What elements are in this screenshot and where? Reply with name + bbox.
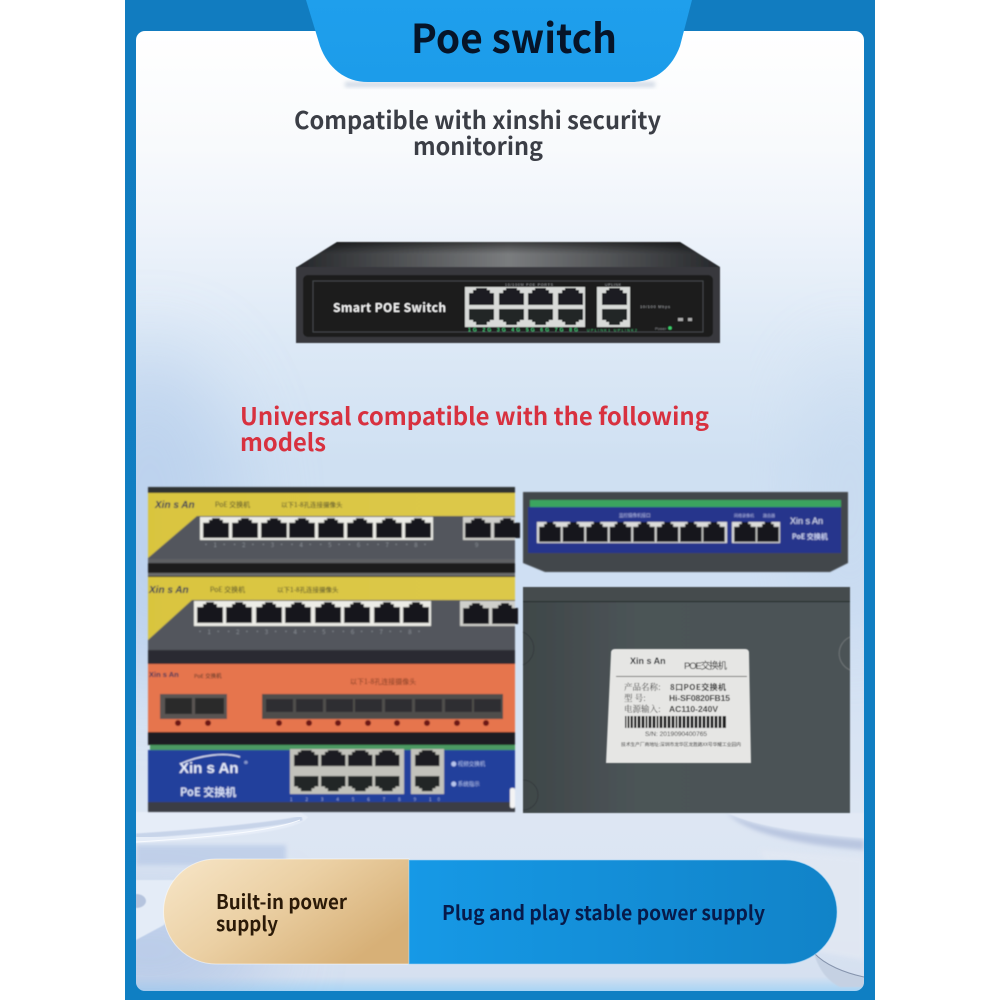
dark gap band <box>148 559 515 577</box>
orange switch: Xin s An <box>149 670 179 679</box>
power indicator <box>655 318 692 331</box>
faceplate labels: 网络录像机 <box>734 512 754 519</box>
yellow switch one: Xin s An <box>154 500 195 511</box>
product: smart POE switch: UPLINK <box>605 283 622 287</box>
yellow switch one: 9 <box>475 540 478 549</box>
photo: stacked switches <box>148 487 520 812</box>
blue switch: Xin s An <box>179 760 238 777</box>
product label: Xin s An <box>630 656 666 666</box>
yellow switch two: Xin s An <box>148 585 189 596</box>
product label: 电源输入: <box>624 703 661 715</box>
product: smart POE switch: UPLINK1 UPLINK2 <box>587 328 637 332</box>
blue switch: ® <box>244 759 248 770</box>
switch front face <box>296 267 720 343</box>
product label: 技术生产厂商地址:深圳市龙华区龙胜路XX号华耀工业园内 <box>621 741 741 748</box>
power indicator: Power <box>655 326 667 331</box>
barcode <box>625 716 726 728</box>
yellow switch one <box>148 487 520 559</box>
pill: plug and play: Plug and play stable power supply <box>442 897 765 926</box>
yellow switch two: 以下1-8孔连接摄像头 <box>277 584 339 594</box>
subtitle: Compatible with xinshi security <box>294 101 661 136</box>
product label: 型 号: <box>624 692 646 704</box>
pill: built-in power supply: supply <box>216 908 278 937</box>
yellow switch one: • 1 • • 2 • • 3 • • 4 • • 5 • • 6 • • 7 • • 8 • <box>203 540 428 549</box>
product label <box>606 649 751 763</box>
compatibility heading <box>240 397 709 458</box>
yellow switch one: 以下1-8孔连接摄像头 <box>281 499 343 509</box>
pill: plug and play <box>409 860 837 964</box>
product: smart POE switch: 10/100 Mbps <box>640 304 670 309</box>
port number labels: 1G 2G 3G 4G 5G 6G 7G 8G <box>468 328 578 334</box>
blue switch: ● 系统指示 <box>451 780 480 788</box>
photo: blue switch front <box>523 492 848 572</box>
feature pill <box>164 859 837 964</box>
green strip <box>530 500 841 507</box>
faceplate labels: Xin s An <box>790 516 823 526</box>
yellow switch two <box>148 577 518 651</box>
faceplate labels: 监控摄像机接口 <box>619 512 650 519</box>
compatibility heading: Universal compatible with the following <box>240 397 709 432</box>
product label: S/N: 2019090400765 <box>645 731 707 738</box>
yellow switch one: PoE 交换机 <box>215 500 250 510</box>
main port block <box>465 287 585 327</box>
blue switch: ● 视频交换机 <box>451 760 486 768</box>
title: Poe switch <box>411 7 617 65</box>
product label: POE交换机 <box>684 660 727 672</box>
compatibility heading: models <box>240 423 326 458</box>
yellow switch two: • 1 • • 2 • • 3 • • 4 • • 5 • • 6 • • 7 • • 8 • <box>197 627 422 636</box>
orange switch: PoE 交换机 <box>194 672 222 680</box>
product label: 产品名称: <box>624 681 661 693</box>
blue switch: 1 2 3 4 5 6 7 8 9 10 <box>290 797 440 803</box>
subtitle <box>294 101 661 162</box>
blue faceplate <box>528 507 841 553</box>
faceplate labels: PoE 交换机 <box>792 532 828 542</box>
blue frame <box>125 0 875 1000</box>
product: smart POE switch <box>296 242 720 343</box>
subtitle: monitoring <box>413 127 543 162</box>
product label: Hi-SF0820FB15 <box>669 693 730 703</box>
uplink port block <box>597 287 630 327</box>
photo: switch underside with label <box>523 587 850 813</box>
orange switch: 以下1-8孔连接摄像头 <box>350 677 416 687</box>
blue switch <box>148 745 515 812</box>
orange switch <box>148 664 515 732</box>
product label: AC110-240V <box>669 704 718 714</box>
port blocks <box>537 522 780 543</box>
pill: built-in power supply: Built-in power <box>216 886 347 915</box>
faceplate labels <box>619 512 828 542</box>
switch name: Smart POE Switch <box>333 299 446 316</box>
title tab <box>306 0 692 87</box>
product label: 8口POE交换机 <box>670 682 726 693</box>
switch top cover <box>297 242 720 267</box>
faceplate labels: 路由器 <box>763 512 775 519</box>
yellow switch two: PoE 交换机 <box>210 585 245 595</box>
pill: built-in power supply <box>164 859 409 964</box>
background panel <box>136 31 864 991</box>
product: smart POE switch: 10/100M POE PORTS <box>505 283 554 287</box>
blue switch: PoE 交换机 <box>180 784 236 800</box>
